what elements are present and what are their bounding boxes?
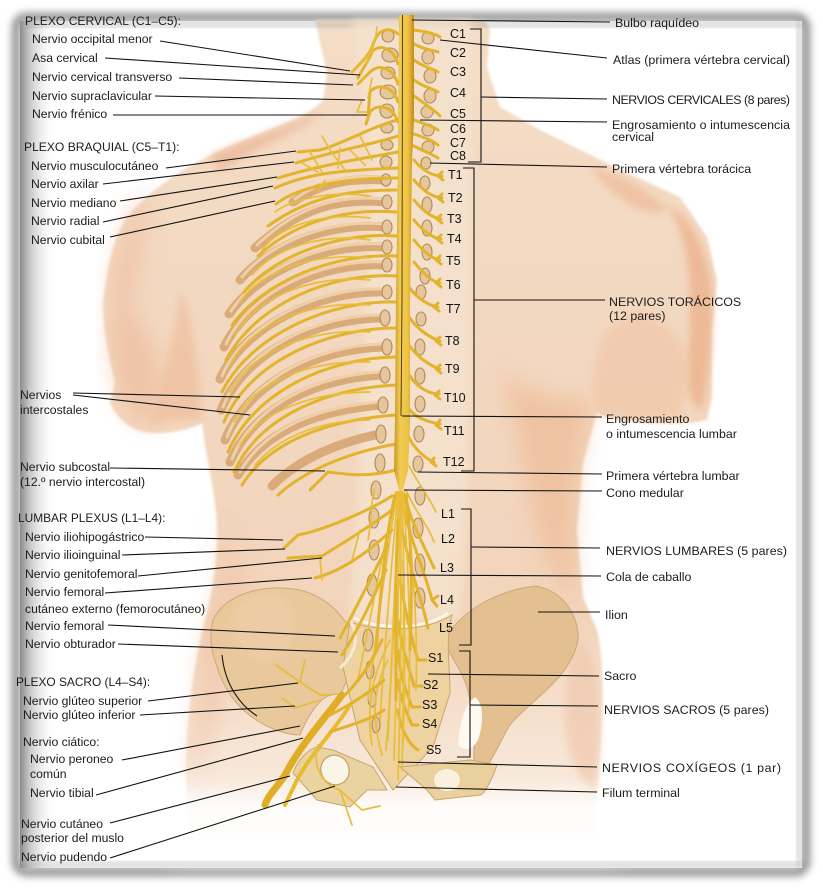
ribs bbox=[220, 177, 385, 486]
labels: plexo sacro: Nervio ciático: bbox=[23, 735, 100, 749]
labels: plexo braquial: PLEXO BRAQUIAL (C5–T1): bbox=[24, 140, 179, 154]
vertebra level labels: S4 bbox=[422, 717, 437, 731]
labels: lumbar plexus: Nervio femoral bbox=[25, 619, 104, 633]
vertebra level labels: C2 bbox=[450, 46, 466, 60]
cauda equina bbox=[358, 492, 416, 780]
leader lines and brackets right bbox=[396, 20, 610, 792]
lumbar plexus bbox=[284, 490, 392, 655]
labels: plexo sacro bbox=[16, 675, 150, 864]
labels: right column: cervical bbox=[612, 130, 654, 144]
vertebra level labels: C1 bbox=[450, 27, 466, 41]
labels: lumbar plexus: Nervio femoral bbox=[25, 585, 104, 599]
labels: lumbar plexus: LUMBAR PLEXUS (L1–L4): bbox=[18, 511, 165, 525]
vertebra level labels: T4 bbox=[447, 232, 462, 246]
labels: right column: (12 pares) bbox=[609, 309, 665, 323]
labels: plexo cervical bbox=[25, 14, 181, 121]
right spinal nerve branches bbox=[398, 30, 443, 750]
vertebra level labels bbox=[422, 27, 466, 757]
vertebra level labels: C4 bbox=[450, 86, 466, 100]
labels: right column: Cola de caballo bbox=[606, 570, 692, 584]
labels: lumbar plexus bbox=[18, 511, 205, 651]
vertebra level labels: S2 bbox=[423, 678, 438, 692]
labels: plexo braquial: Nervio axilar bbox=[31, 177, 99, 191]
vertebra level labels: T7 bbox=[446, 302, 461, 316]
labels: intercostales bbox=[20, 388, 145, 489]
vertebra level labels: T3 bbox=[447, 212, 462, 226]
labels: plexo sacro: posterior del muslo bbox=[21, 831, 124, 845]
vertebra level labels: T8 bbox=[445, 334, 460, 348]
vertebra level labels: S3 bbox=[422, 698, 437, 712]
labels: plexo sacro: común bbox=[30, 767, 67, 781]
vertebra level labels: T6 bbox=[446, 278, 461, 292]
labels: plexo sacro: Nervio pudendo bbox=[21, 850, 107, 864]
labels: right column: Primera vértebra torácica bbox=[612, 162, 751, 176]
labels: right column: Engrosamiento o intumescencia bbox=[612, 118, 790, 132]
labels: right column: Sacro bbox=[604, 669, 636, 683]
labels: plexo braquial: Nervio musculocutáneo bbox=[31, 159, 159, 173]
brachial plexus bbox=[275, 120, 398, 204]
labels: right column: NERVIOS LUMBARES (5 pares) bbox=[606, 544, 787, 558]
labels: intercostales: Nervio subcostal bbox=[20, 460, 110, 474]
vertebra level labels: L2 bbox=[441, 532, 455, 546]
labels: lumbar plexus: cutáneo externo (femorocutáneo) bbox=[25, 602, 205, 616]
vertebra level labels: T5 bbox=[446, 254, 461, 268]
vertebra level labels: C6 bbox=[450, 122, 466, 136]
labels: plexo braquial: Nervio mediano bbox=[31, 196, 117, 210]
labels: right column: NERVIOS TORÁCICOS bbox=[609, 294, 741, 309]
sacral plexus and sciatic nerve bbox=[265, 640, 384, 825]
labels: right column: Ilion bbox=[605, 608, 628, 622]
leader lines left bbox=[73, 41, 367, 858]
body silhouette bbox=[103, 20, 717, 860]
labels: right column: Bulbo raquídeo bbox=[615, 16, 699, 30]
labels: plexo braquial: Nervio radial bbox=[31, 214, 99, 228]
labels: right column: Engrosamiento bbox=[606, 412, 689, 426]
spinal cord and medullary cone bbox=[394, 15, 414, 498]
vertebra level labels: S5 bbox=[426, 743, 441, 757]
vertebra level labels: L3 bbox=[440, 561, 454, 575]
labels: lumbar plexus: Nervio ilioinguinal bbox=[25, 548, 121, 562]
labels: plexo cervical: Nervio occipital menor bbox=[32, 32, 153, 46]
vertebra level labels: T10 bbox=[444, 391, 466, 405]
labels: plexo sacro: Nervio peroneo bbox=[30, 752, 114, 766]
vertebra level labels: C3 bbox=[450, 65, 466, 79]
spinal nerves: left intercostal branches bbox=[222, 190, 396, 495]
labels: plexo sacro: Nervio cutáneo bbox=[21, 817, 103, 831]
labels: intercostales: Nervios bbox=[20, 388, 61, 402]
vertebra level labels: T9 bbox=[445, 362, 460, 376]
vertebra level labels: C7 bbox=[450, 136, 466, 150]
vertebra level labels: T2 bbox=[448, 191, 463, 205]
labels: right column: NERVIOS CERVICALES (8 pares) bbox=[612, 93, 790, 107]
cervical plexus bbox=[352, 27, 398, 124]
labels: intercostales: intercostales bbox=[20, 403, 88, 417]
vertebra level labels: S1 bbox=[428, 651, 443, 665]
labels: plexo sacro: Nervio glúteo superior bbox=[23, 694, 142, 708]
labels: plexo braquial: Nervio cubital bbox=[31, 233, 105, 247]
labels: right column: o intumescencia lumbar bbox=[606, 427, 737, 441]
labels: right column: Atlas (primera vértebra cervical) bbox=[613, 53, 790, 67]
labels: right column: NERVIOS COXÍGEOS (1 par) bbox=[602, 760, 781, 775]
labels: plexo cervical: Nervio supraclavicular bbox=[32, 89, 152, 103]
vertebra level labels: T12 bbox=[443, 455, 465, 469]
labels: lumbar plexus: Nervio iliohipogástrico bbox=[25, 530, 144, 544]
vertebral column bbox=[350, 20, 472, 620]
labels: intercostales: (12.º nervio intercostal) bbox=[20, 475, 145, 489]
labels: plexo cervical: PLEXO CERVICAL (C1–C5): bbox=[25, 14, 181, 28]
vertebra level labels: C8 bbox=[450, 149, 466, 163]
vertebrae ovals bbox=[363, 30, 436, 733]
labels: plexo cervical: Asa cervical bbox=[32, 51, 98, 65]
labels: plexo cervical: Nervio cervical transverso bbox=[32, 70, 172, 84]
labels: lumbar plexus: Nervio obturador bbox=[25, 637, 116, 651]
labels: plexo braquial bbox=[24, 140, 179, 247]
pelvis bones bbox=[211, 586, 578, 807]
labels: plexo sacro: PLEXO SACRO (L4–S4): bbox=[16, 675, 150, 689]
labels: right column: Filum terminal bbox=[602, 786, 680, 800]
vertebra level labels: L1 bbox=[441, 507, 455, 521]
vertebra level labels: C5 bbox=[450, 107, 466, 121]
labels: plexo sacro: Nervio glúteo inferior bbox=[23, 708, 135, 722]
vertebra level labels: L5 bbox=[439, 621, 453, 635]
labels: right column: Cono medular bbox=[606, 486, 684, 500]
labels: plexo sacro: Nervio tibial bbox=[30, 786, 94, 800]
labels: right column: NERVIOS SACROS (5 pares) bbox=[604, 703, 769, 717]
vertebra level labels: L4 bbox=[440, 593, 454, 607]
labels: right column bbox=[602, 16, 790, 800]
labels: lumbar plexus: Nervio genitofemoral bbox=[25, 567, 137, 581]
labels: plexo cervical: Nervio frénico bbox=[32, 107, 107, 121]
vertebra level labels: T1 bbox=[448, 168, 463, 182]
labels: right column: Primera vértebra lumbar bbox=[606, 469, 740, 483]
vertebra level labels: T11 bbox=[444, 424, 465, 438]
